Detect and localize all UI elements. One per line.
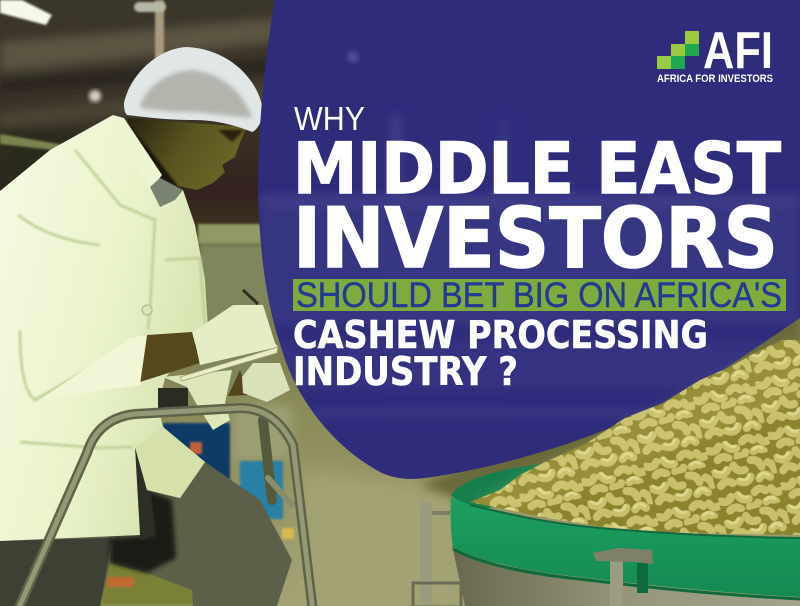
hairnet shading xyxy=(140,70,252,118)
eye xyxy=(218,130,244,142)
left post xyxy=(413,502,461,606)
heap lighting xyxy=(470,340,800,510)
logo pixel staircase xyxy=(657,31,699,69)
headline: industry: INDUSTRY ? xyxy=(293,350,518,395)
coat collar xyxy=(113,115,162,190)
AFI logo xyxy=(657,22,773,85)
coat skirt shade xyxy=(135,427,205,498)
blue title panel xyxy=(258,0,800,479)
neck and face xyxy=(127,118,247,190)
headline: cashew processing: CASHEW PROCESSING xyxy=(293,313,708,357)
floor xyxy=(95,560,200,606)
notepad xyxy=(180,347,278,381)
logo wordmark: AFI xyxy=(703,22,773,80)
bowl inner back rim xyxy=(451,462,560,510)
railing xyxy=(17,408,313,606)
worker xyxy=(0,47,292,606)
hanging lamp xyxy=(89,90,101,102)
ceiling beams xyxy=(0,18,280,190)
steel tank xyxy=(200,244,270,394)
ceiling light xyxy=(0,0,52,25)
front clamp post xyxy=(593,548,653,606)
shirt collar xyxy=(150,178,183,207)
clamp shadow xyxy=(637,563,648,593)
coat sleeve xyxy=(40,335,147,400)
cashew heap xyxy=(470,340,800,535)
pen xyxy=(243,290,258,304)
forearm xyxy=(140,332,200,382)
pale blurred machinery xyxy=(232,405,292,460)
lab coat xyxy=(0,115,208,541)
trousers xyxy=(0,447,292,606)
headline: why: WHY xyxy=(294,100,365,137)
olive wall stripe xyxy=(0,134,70,152)
olive band behind heap xyxy=(420,310,800,500)
headline xyxy=(293,100,786,395)
lower cuff xyxy=(163,370,232,430)
dark gap under arm xyxy=(158,388,188,410)
hairnet xyxy=(124,47,263,132)
band top edge xyxy=(470,505,800,538)
logo tagline: AFRICA FOR INVESTORS xyxy=(657,73,773,85)
face shadow xyxy=(122,118,178,186)
coat folds xyxy=(18,150,205,448)
upper glove xyxy=(193,305,278,365)
hanging pole xyxy=(134,0,166,62)
band bottom line xyxy=(453,549,800,599)
wrist xyxy=(228,370,248,396)
blue crates xyxy=(107,423,294,587)
lower glove xyxy=(242,363,290,402)
bowl steel base xyxy=(452,545,800,606)
bowl green band xyxy=(451,497,800,597)
coat button xyxy=(142,305,152,315)
green tank rail xyxy=(198,224,268,244)
cashew bowl xyxy=(413,340,800,606)
ghosted factory inside panel xyxy=(260,51,800,416)
